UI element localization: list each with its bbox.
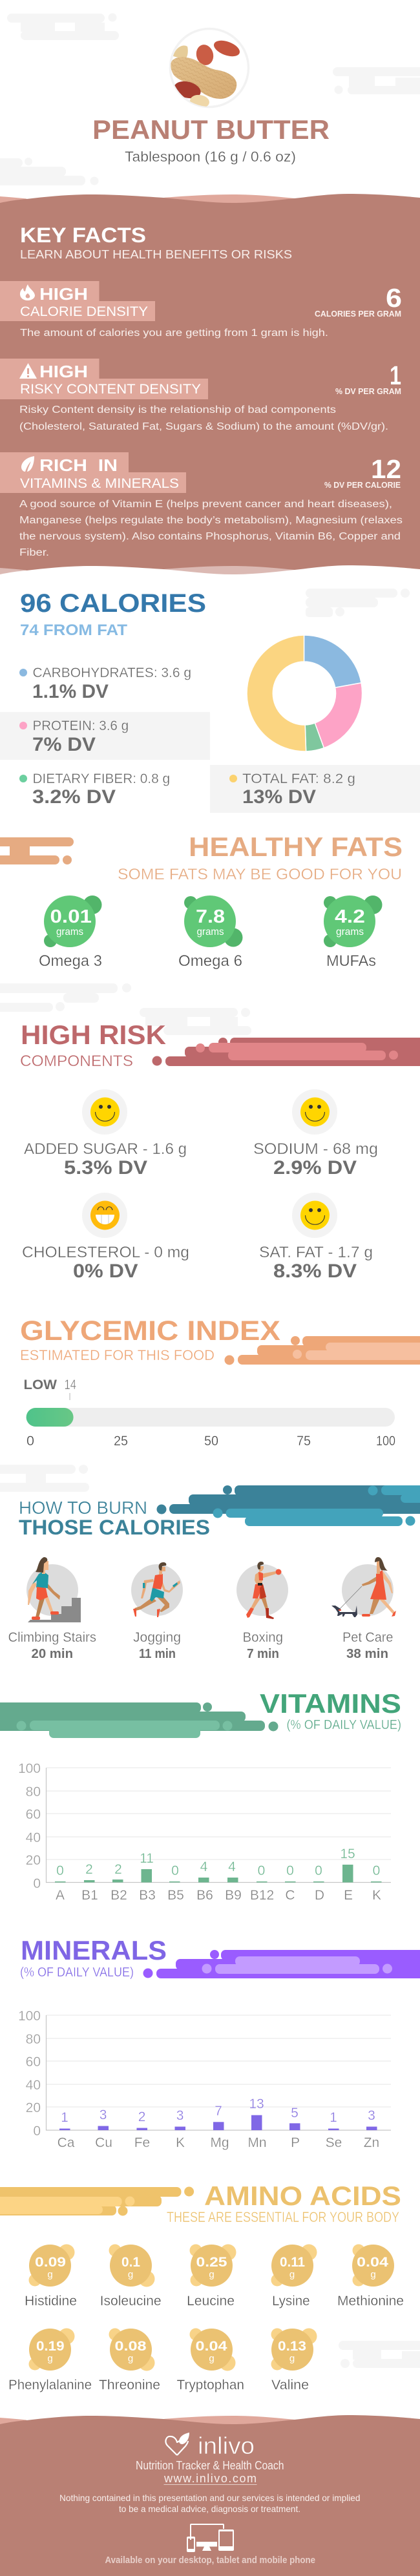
- risk item: added sugar: ADDED SUGAR - 1.6 g: [24, 1140, 187, 1158]
- heading: how to burn those calories: THOSE CALORIES: [19, 1516, 210, 1539]
- heading: minerals: [20, 1935, 167, 1980]
- amino acid: threonine: g: [128, 2353, 133, 2364]
- chart: minerals bar chart: 7: [215, 2104, 222, 2119]
- fact: calorie density: CALORIE DENSITY: [20, 304, 148, 319]
- chart: minerals bar chart: 5: [291, 2106, 299, 2120]
- amino acid: isoleucine: [100, 2245, 162, 2309]
- icon: smiley: [292, 1193, 337, 1238]
- chart: minerals bar chart: Mn: [247, 2135, 267, 2150]
- heading: healthy fats: [118, 832, 403, 883]
- amino acid: methionine: Methionine: [337, 2293, 404, 2309]
- chart: vitamins bar chart: B9: [225, 1888, 242, 1903]
- chart: minerals bar chart: Zn: [364, 2135, 379, 2150]
- chart: vitamins bar chart: 2: [85, 1862, 93, 1877]
- amino acid: histidine: 0.09: [35, 2255, 66, 2270]
- legend: protein: [0, 712, 210, 760]
- panel: footer: www.inlivo.com: [163, 2472, 257, 2485]
- stat: omega 3: grams: [56, 927, 83, 937]
- heading: healthy fats: SOME FATS MAY BE GOOD FOR YOU: [118, 866, 402, 883]
- chart: glycemic index gauge: LOW: [23, 1377, 57, 1392]
- legend: total fat: 13% DV: [242, 786, 316, 808]
- chart: vitamins bar chart: [18, 1761, 391, 1903]
- amino acid: threonine: [99, 2329, 160, 2393]
- risk item: saturated fat: 8.3% DV: [273, 1261, 357, 1282]
- chart: vitamins bar chart: 100: [18, 1761, 41, 1776]
- heading: calories: 96 CALORIES: [20, 589, 206, 618]
- chart: minerals bar chart: Fe: [134, 2135, 150, 2150]
- heading: vitamins: [260, 1688, 401, 1732]
- fact: calorie density: [0, 281, 402, 339]
- decorative bars: healthy fats: [0, 837, 74, 864]
- amino acid: leucine: g: [209, 2269, 215, 2280]
- fact: rich in vitamins and minerals: A good source of Vitamin E (helps prevent cancer and heart diseases),: [19, 499, 392, 510]
- fact: risky content density: HIGH: [39, 362, 88, 381]
- fact: calorie density: HIGH: [39, 284, 88, 304]
- chart: vitamins bar chart: 0: [56, 1863, 64, 1878]
- icon: desktop, tablet and phone: [187, 2524, 234, 2552]
- risk item: saturated fat: [259, 1193, 373, 1282]
- chart: minerals bar chart: 40: [26, 2078, 41, 2093]
- chart: minerals bar chart: 1: [61, 2110, 68, 2125]
- chart: minerals bar chart: Ca: [58, 2135, 75, 2150]
- heading: how to burn those calories: [19, 1498, 210, 1539]
- heading: calories: 74 FROM FAT: [20, 622, 127, 639]
- stat: mufas: [324, 895, 383, 970]
- fact: risky content density: RISKY CONTENT DENSITY: [20, 382, 201, 397]
- amino acid: valine: 0.13: [278, 2339, 306, 2354]
- amino acid: threonine: 0.08: [115, 2339, 147, 2354]
- heading: minerals: MINERALS: [21, 1935, 167, 1965]
- heading: key facts: KEY FACTS: [20, 224, 146, 247]
- legend: dietary fiber: [19, 771, 170, 808]
- chart: minerals bar chart: 100: [18, 2009, 41, 2024]
- chart: minerals bar chart: 13: [249, 2097, 264, 2111]
- legend: total fat: [210, 765, 420, 813]
- heading: glycemic index: GLYCEMIC INDEX: [20, 1315, 280, 1346]
- chart: minerals bar chart: 3: [176, 2108, 184, 2123]
- chart: minerals bar chart: 20: [26, 2100, 41, 2115]
- chart: glycemic index gauge: [23, 1377, 395, 1449]
- amino acid: methionine: [337, 2245, 404, 2309]
- panel: key facts background: [0, 194, 420, 585]
- decorative cloud: burn calories: [0, 1465, 89, 1492]
- activity: pet care: [331, 1557, 396, 1661]
- chart: vitamins bar chart: 15: [340, 1847, 355, 1861]
- title: Tablespoon (16 g / 0.6 oz): [125, 149, 296, 165]
- stat: omega 6: [178, 895, 243, 970]
- activity: pet care: Pet Care: [342, 1630, 393, 1645]
- stat: mufas: grams: [336, 927, 364, 937]
- icon: inlivo heart logo: [166, 2433, 189, 2455]
- decorative bars: high risk: [152, 1038, 420, 1066]
- amino acid: valine: Valine: [271, 2377, 309, 2393]
- fact: rich in vitamins and minerals: RICH IN: [39, 456, 118, 475]
- icon: woman walking dog: [331, 1557, 396, 1617]
- amino acid: leucine: 0.25: [196, 2255, 227, 2270]
- fact: rich in vitamins and minerals: Fiber.: [19, 547, 49, 558]
- decorative cloud: amino acids: [339, 2341, 420, 2368]
- chart: glycemic index gauge: 0: [26, 1434, 34, 1449]
- legend: total fat: TOTAL FAT: 8.2 g: [242, 771, 355, 786]
- fact: rich in vitamins and minerals: [0, 452, 403, 558]
- chart: vitamins bar chart: B2: [110, 1888, 127, 1903]
- fact: risky content density: Risky Content density is the relationship of bad components: [19, 404, 336, 415]
- icon: leaf: [21, 456, 34, 472]
- icon: grinning face: [82, 1193, 127, 1238]
- risk item: cholesterol: 0% DV: [73, 1261, 138, 1282]
- risk item: cholesterol: CHOLESTEROL - 0 mg: [22, 1244, 189, 1261]
- amino acid: phenylalanine: [8, 2329, 92, 2393]
- decorative clouds: high risk: [0, 983, 251, 1035]
- chart: vitamins bar chart: 4: [228, 1859, 236, 1874]
- chart: vitamins bar chart: 0: [286, 1863, 294, 1878]
- legend: carbohydrates: [19, 665, 191, 702]
- risk item: sodium: [253, 1089, 378, 1178]
- panel: footer: Nutrition Tracker & Health Coach: [136, 2459, 284, 2472]
- fact: rich in vitamins and minerals: 12: [371, 454, 401, 484]
- fact: risky content density: 1: [390, 361, 401, 390]
- heading: glycemic index: [20, 1315, 280, 1363]
- activity: jogging: [131, 1562, 183, 1661]
- panel: footer: Available on your desktop, tablet and mobile phone: [105, 2555, 315, 2566]
- fact: rich in vitamins and minerals: VITAMINS & MINERALS: [20, 476, 179, 491]
- legend: dietary fiber: DIETARY FIBER: 0.8 g: [32, 771, 170, 786]
- decorative clouds: header: [0, 13, 420, 185]
- heading: vitamins: VITAMINS: [260, 1688, 401, 1719]
- activity: climbing stairs: [8, 1557, 96, 1661]
- food image: peanuts: [171, 28, 248, 109]
- stat: omega 6: grams: [196, 927, 224, 937]
- risk item: saturated fat: SAT. FAT - 1.7 g: [259, 1244, 373, 1261]
- amino acid: phenylalanine: Phenylalanine: [8, 2377, 92, 2393]
- legend: protein: 7% DV: [32, 734, 96, 755]
- decorative bars: burn calories: [156, 1485, 420, 1526]
- heading: high risk: [20, 1020, 166, 1070]
- activity: jogging: Jogging: [133, 1630, 181, 1645]
- amino acid: tryptophan: Tryptophan: [177, 2377, 244, 2393]
- title: PEANUT BUTTER: [92, 114, 330, 145]
- heading: how to burn those calories: HOW TO BURN: [19, 1498, 147, 1518]
- fact: rich in vitamins and minerals: the nervous system). Also contains Phosphorus, Vitamin B6, Copper and: [19, 531, 401, 542]
- stat: omega 3: 0.01: [50, 906, 92, 927]
- amino acid: lysine: 0.11: [280, 2255, 305, 2270]
- fact: calorie density: The amount of calories you are getting from 1 gram is high.: [20, 328, 328, 339]
- risk item: sodium: SODIUM - 68 mg: [253, 1140, 378, 1158]
- amino acid: tryptophan: g: [209, 2353, 215, 2364]
- chart: minerals bar chart: P: [291, 2135, 300, 2150]
- legend: carbohydrates: CARBOHYDRATES: 3.6 g: [32, 665, 191, 680]
- legend: dietary fiber: 3.2% DV: [32, 786, 116, 808]
- fact: risky content density: (Cholesterol, Saturated Fat, Sugars & Sodium) to the amount (%DV/gr).: [19, 421, 388, 432]
- chart: minerals bar chart: Cu: [95, 2135, 112, 2150]
- amino acid: lysine: [271, 2245, 317, 2309]
- chart: vitamins bar chart: 40: [26, 1830, 41, 1845]
- panel: footer: inlivo: [198, 2433, 255, 2459]
- amino acid: lysine: g: [289, 2269, 295, 2280]
- panel: footer: Nothing contained in this presentation and our services is intended or implied: [59, 2493, 361, 2503]
- risk item: added sugar: [24, 1089, 187, 1178]
- chart: vitamins bar chart: 80: [26, 1785, 41, 1799]
- chart: minerals bar chart: Se: [326, 2135, 342, 2150]
- activity: boxing: Boxing: [243, 1630, 283, 1645]
- heading: glycemic index: ESTIMATED FOR THIS FOOD: [20, 1347, 215, 1363]
- decorative cloud: calories: [306, 589, 410, 617]
- amino acid: histidine: [25, 2245, 77, 2309]
- risk item: added sugar: 5.3% DV: [64, 1157, 147, 1178]
- chart: macronutrient donut: [247, 635, 362, 751]
- heading: healthy fats: HEALTHY FATS: [189, 832, 403, 862]
- icon: warning triangle: [19, 363, 37, 379]
- risk item: cholesterol: [22, 1193, 189, 1282]
- chart: vitamins bar chart: 20: [26, 1853, 41, 1868]
- chart: glycemic index gauge: 100: [376, 1434, 395, 1449]
- activity: pet care: 38 min: [346, 1647, 388, 1661]
- chart: minerals bar chart: 2: [138, 2110, 145, 2124]
- icon: smiley: [292, 1089, 337, 1135]
- chart: vitamins bar chart: 4: [200, 1859, 208, 1874]
- activity: jogging: 11 min: [139, 1647, 176, 1661]
- chart: vitamins bar chart: C: [285, 1888, 295, 1903]
- chart: vitamins bar chart: 60: [26, 1807, 41, 1822]
- panel: footer: to be a medical advice, diagnosis or treatment.: [119, 2504, 300, 2514]
- heading: vitamins: (% OF DAILY VALUE): [287, 1718, 401, 1732]
- chart: glycemic index gauge: 25: [114, 1434, 128, 1449]
- chart: vitamins bar chart: E: [344, 1888, 353, 1903]
- amino acid: tryptophan: 0.04: [195, 2339, 227, 2354]
- heading: high risk: HIGH RISK: [21, 1020, 166, 1050]
- heading: minerals: (% OF DAILY VALUE): [20, 1965, 134, 1980]
- chart: minerals bar chart: 0: [33, 2124, 41, 2139]
- amino acid: methionine: g: [370, 2269, 376, 2280]
- decorative bars: vitamins: [0, 1702, 278, 1738]
- fact: calorie density: CALORIES PER GRAM: [315, 309, 401, 319]
- legend: protein: PROTEIN: 3.6 g: [32, 718, 129, 733]
- chart: vitamins bar chart: B6: [196, 1888, 213, 1903]
- chart: glycemic index gauge: 14: [65, 1377, 76, 1392]
- panel: footer: [0, 2415, 420, 2576]
- heading: amino acids: [167, 2181, 401, 2225]
- icon: smiley: [82, 1089, 127, 1135]
- chart: vitamins bar chart: 2: [114, 1862, 122, 1877]
- amino acid: phenylalanine: g: [47, 2353, 53, 2364]
- amino acid: isoleucine: g: [128, 2269, 133, 2280]
- amino acid: phenylalanine: 0.19: [36, 2339, 65, 2354]
- heading: key facts: LEARN ABOUT HEALTH BENEFITS OR RISKS: [20, 248, 292, 261]
- chart: vitamins bar chart: B5: [167, 1888, 184, 1903]
- stat: mufas: 4.2: [335, 906, 365, 927]
- chart: minerals bar chart: K: [176, 2135, 185, 2150]
- amino acid: leucine: Leucine: [187, 2293, 235, 2309]
- chart: glycemic index gauge: 50: [204, 1434, 218, 1449]
- legend: carbohydrates: 1.1% DV: [32, 681, 109, 702]
- activity: climbing stairs: Climbing Stairs: [8, 1630, 96, 1645]
- stat: omega 6: 7.8: [196, 906, 225, 927]
- icon: flame: [20, 284, 35, 300]
- fact: rich in vitamins and minerals: Manganese (helps regulate the body’s metabolism), Magnesium (relaxes: [19, 515, 403, 526]
- fact: rich in vitamins and minerals: % DV PER CALORIE: [324, 480, 401, 490]
- heading: amino acids: AMINO ACIDS: [204, 2181, 401, 2211]
- chart: vitamins bar chart: 0: [315, 1863, 322, 1878]
- icon: runner: [133, 1562, 180, 1617]
- heading: calories: [20, 589, 206, 639]
- amino acid: methionine: 0.04: [357, 2255, 388, 2270]
- chart: vitamins bar chart: 0: [258, 1863, 265, 1878]
- chart: minerals bar chart: 80: [26, 2032, 41, 2047]
- activity: climbing stairs: 20 min: [31, 1647, 73, 1661]
- chart: minerals bar chart: 3: [100, 2108, 107, 2122]
- chart: vitamins bar chart: D: [315, 1888, 324, 1903]
- amino acid: valine: [271, 2329, 317, 2393]
- fact: risky content density: % DV PER GRAM: [335, 386, 401, 396]
- title: [92, 114, 330, 165]
- chart: glycemic index gauge: 75: [297, 1434, 311, 1449]
- amino acid: lysine: Lysine: [272, 2293, 310, 2309]
- chart: vitamins bar chart: B12: [250, 1888, 274, 1903]
- fact: calorie density: 6: [386, 283, 402, 313]
- amino acid: tryptophan: [177, 2329, 244, 2393]
- chart: vitamins bar chart: 0: [33, 1876, 41, 1891]
- heading: key facts: [20, 224, 292, 261]
- decorative bars: amino acids: [0, 2186, 194, 2216]
- activity: boxing: 7 min: [247, 1647, 279, 1661]
- amino acid: valine: g: [289, 2353, 295, 2364]
- risk item: sodium: 2.9% DV: [273, 1157, 357, 1178]
- stat: mufas: MUFAs: [326, 952, 376, 970]
- activity: boxing: [236, 1562, 288, 1661]
- decorative bars: minerals: [143, 1950, 420, 1978]
- chart: minerals bar chart: 60: [26, 2055, 41, 2069]
- heading: high risk: COMPONENTS: [20, 1052, 133, 1070]
- chart: vitamins bar chart: B3: [139, 1888, 156, 1903]
- amino acid: isoleucine: Isoleucine: [100, 2293, 162, 2309]
- chart: minerals bar chart: 1: [330, 2110, 337, 2125]
- amino acid: threonine: Threonine: [99, 2377, 160, 2393]
- icon: boxer: [246, 1562, 282, 1619]
- icon: woman climbing stairs: [28, 1557, 81, 1622]
- chart: vitamins bar chart: 11: [140, 1851, 154, 1866]
- stat: omega 3: Omega 3: [39, 952, 102, 970]
- amino acid: leucine: [187, 2245, 236, 2309]
- chart: vitamins bar chart: 0: [171, 1863, 179, 1878]
- amino acid: isoleucine: 0.1: [121, 2255, 140, 2270]
- chart: minerals bar chart: 3: [368, 2108, 375, 2123]
- stat: omega 3: [39, 895, 102, 970]
- chart: vitamins bar chart: B1: [81, 1888, 98, 1903]
- amino acid: histidine: Histidine: [25, 2293, 77, 2309]
- chart: minerals bar chart: Mg: [210, 2135, 229, 2150]
- chart: vitamins bar chart: A: [56, 1888, 65, 1903]
- chart: vitamins bar chart: K: [372, 1888, 381, 1903]
- stat: omega 6: Omega 6: [178, 952, 242, 970]
- chart: minerals bar chart: [18, 2009, 391, 2150]
- decorative bars: glycemic index: [225, 1336, 420, 1365]
- amino acid: histidine: g: [47, 2269, 53, 2280]
- fact: risky content density: [0, 359, 401, 432]
- chart: vitamins bar chart: 0: [373, 1863, 380, 1878]
